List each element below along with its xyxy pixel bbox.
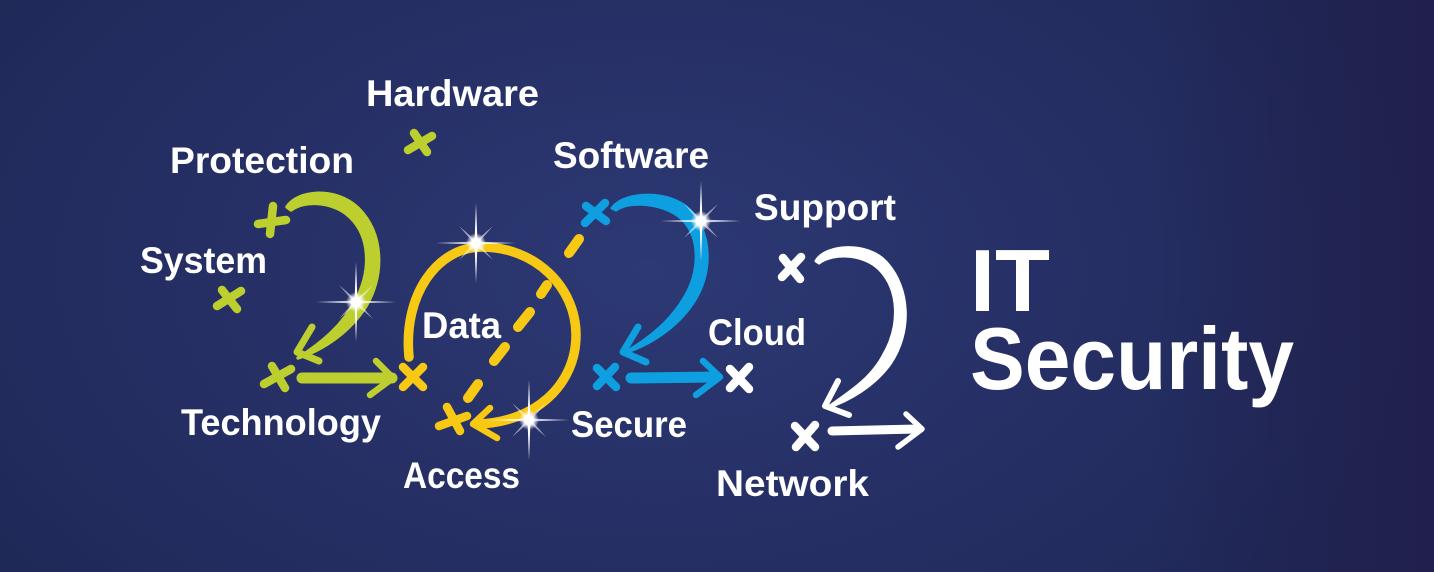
green bottom arrowhead [370,361,393,395]
marker: software [585,203,606,223]
digit 2: white [816,248,922,447]
label: Support: Support [754,187,896,228]
white bottom arrowhead [898,414,922,447]
digit 0: yellow [408,239,579,438]
marker: cloud [730,367,749,389]
digit 2: blue [612,195,720,395]
blue bottom arrow [631,377,716,378]
marker: technology [264,366,291,388]
marker: access [439,407,467,431]
sparkle on yellow top [436,203,516,283]
marker: support [782,257,801,279]
label: Technology: Technology [181,402,381,443]
marker: protection [258,206,286,234]
label: System: System [140,240,267,281]
sparkle on yellow bottom [489,380,569,460]
label: Network: Network [716,463,869,504]
marker: hardware [408,133,432,152]
label: Secure: Secure [571,404,687,445]
label: Software: Software [553,135,709,176]
title line: Security: Security [970,309,1294,408]
cross markers [217,133,815,447]
green bottom arrow [302,372,392,384]
blue bottom arrowhead [696,361,720,395]
white curve arrowhead [825,381,849,415]
label: Data: Data [422,305,501,346]
title: IT Security [970,231,1294,408]
marker: system [217,290,241,309]
sparkles [316,181,741,460]
digit 2: green [287,193,393,395]
label: Protection: Protection [170,140,354,181]
marker: secure [597,367,616,387]
blue curve [612,195,707,353]
sparkle on green [316,262,396,342]
green curve [287,193,379,358]
green curve arrowhead [297,327,319,361]
title line: IT: IT [970,231,1050,330]
label: Access: Access [403,455,520,496]
yellow ring [408,247,576,424]
white bottom arrow [832,429,918,431]
label: Cloud: Cloud [708,312,806,353]
label: Hardware: Hardware [366,73,539,114]
yellow arrowhead [473,408,497,438]
marker: network [795,425,815,447]
keyword labels [140,73,896,504]
blue curve arrowhead [623,327,646,362]
yellow dashed diagonal [468,239,579,398]
sparkle on blue [661,181,741,261]
marker: yellow start [403,367,423,387]
white curve [816,248,905,408]
